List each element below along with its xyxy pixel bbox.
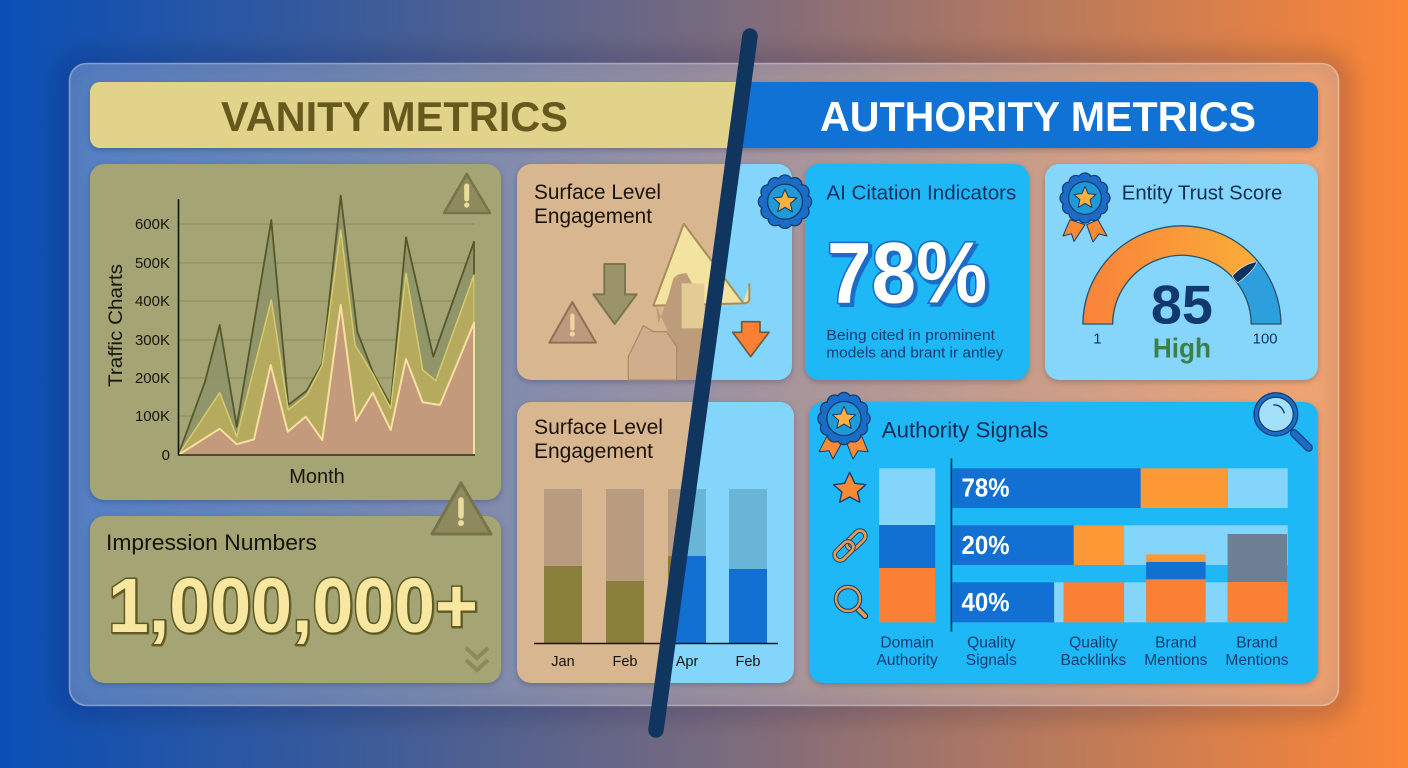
y axis labels <box>135 216 170 464</box>
impression value: 1,000,000+ <box>108 563 478 649</box>
month labels: Feb <box>736 654 760 670</box>
value labels <box>962 473 1010 617</box>
month labels: Jan <box>551 654 575 670</box>
heading: vanity metrics: VANITY METRICS <box>221 93 568 140</box>
header banner <box>90 82 1318 148</box>
panel: traffic charts <box>90 164 501 500</box>
card background blue side <box>670 402 796 688</box>
icon: warning triangle <box>432 483 491 534</box>
icon: star <box>833 472 866 502</box>
gauge rating: High <box>1153 333 1211 363</box>
bar: feb second <box>729 489 767 643</box>
gauge blue arc <box>1235 261 1281 324</box>
month labels: Apr <box>676 654 698 670</box>
surface heading: Engagement <box>534 205 652 228</box>
icon: down chevrons <box>466 648 488 670</box>
value labels: 40% <box>962 587 1010 617</box>
pink area series <box>178 305 474 455</box>
icon: warning triangle small <box>549 302 596 343</box>
authority card content <box>833 395 1309 669</box>
panel: surface level engagement bars <box>517 402 794 683</box>
icon: warning triangle <box>444 174 490 213</box>
panel: entity trust score <box>1045 164 1318 380</box>
bar baseline <box>534 642 778 644</box>
traffic area chart <box>105 196 475 488</box>
chart vertical axis <box>949 458 954 632</box>
icon: badge on surface card <box>758 175 812 228</box>
card background tan side <box>515 164 725 384</box>
y axis labels: 300K <box>135 332 170 349</box>
ai description: models and brant ir antley <box>826 344 1004 361</box>
ai description: Being cited in prominent <box>826 327 996 344</box>
icon: chain link <box>832 528 868 563</box>
gauge max label: 100 <box>1253 332 1277 348</box>
category labels: Mentions <box>1144 652 1208 669</box>
entity heading: Entity Trust Score <box>1122 181 1282 204</box>
icon: award ribbon <box>818 392 870 459</box>
ai card content <box>826 181 1016 361</box>
value labels: 20% <box>962 530 1010 560</box>
card background blue side <box>711 164 794 384</box>
glass dashboard panel <box>70 64 1338 706</box>
gauge needle <box>1232 262 1257 283</box>
y axis labels: 500K <box>135 255 170 272</box>
panel soft shadow <box>66 62 1342 708</box>
impression heading: Impression Numbers <box>106 530 317 555</box>
y axis labels: 400K <box>135 293 170 310</box>
stacked column: domain authority <box>879 468 935 622</box>
stacked column: brand mentions two <box>1228 534 1288 622</box>
impression card background <box>90 516 501 683</box>
surface heading: Engagement <box>534 440 653 463</box>
row: 20 percent <box>952 525 1288 565</box>
gauge <box>1083 226 1281 363</box>
category labels: Mentions <box>1225 652 1289 669</box>
category labels: Signals <box>966 652 1017 669</box>
category labels: Domain <box>880 635 934 652</box>
value labels: 78% <box>962 473 1010 503</box>
row: 40 percent <box>952 582 1228 622</box>
panel: ai citation indicators <box>805 164 1029 380</box>
chart grid lines <box>178 224 474 416</box>
ai card background <box>805 164 1029 380</box>
icon: orange down arrow <box>733 322 769 357</box>
surface heading: Surface Level <box>534 181 661 204</box>
surface heading: Surface Level <box>534 416 663 439</box>
slanted divider <box>656 36 750 730</box>
gauge value: 85 <box>1151 274 1213 335</box>
row: 78 percent <box>952 468 1288 508</box>
peak shape <box>656 273 710 380</box>
panel: authority signals <box>809 392 1318 683</box>
bar: apr tan side <box>668 489 681 584</box>
stacked column: brand mentions one <box>1146 554 1206 622</box>
traffic card background <box>90 164 501 500</box>
authority heading: Authority Signals <box>882 418 1048 443</box>
icon: olive down arrow <box>593 264 637 324</box>
y axis labels: 600K <box>135 216 170 233</box>
category labels: Brand <box>1155 635 1197 652</box>
dark area series <box>178 196 474 455</box>
authority card background <box>809 402 1318 683</box>
bar: apr blue side <box>676 489 706 643</box>
month labels: Feb <box>612 654 638 670</box>
y axis labels: 0 <box>162 447 170 464</box>
ai heading: AI Citation Indicators <box>826 181 1016 204</box>
percentage value: 78% <box>827 226 987 321</box>
panel: impression numbers <box>90 483 501 683</box>
category labels <box>876 635 1289 669</box>
panel: surface level engagement icons <box>517 164 792 380</box>
heading: authority metrics: AUTHORITY METRICS <box>820 93 1256 140</box>
x axis title: Month <box>289 466 345 488</box>
icon: award ribbon <box>1060 173 1110 242</box>
foreground peak <box>628 326 677 380</box>
header right: authority metrics <box>742 81 1321 153</box>
yellow area series <box>178 230 474 455</box>
category labels: Authority <box>876 652 938 669</box>
gauge min label: 1 <box>1093 332 1102 348</box>
icon: large magnifier <box>1256 395 1309 448</box>
chart axes <box>178 199 475 455</box>
icon: small magnifier <box>836 587 865 616</box>
header left: vanity metrics <box>88 82 736 152</box>
entity card background <box>1045 164 1318 380</box>
category labels: Brand <box>1236 635 1278 652</box>
bar: jan <box>544 489 582 643</box>
bar chart <box>534 489 778 670</box>
pale inner block <box>682 283 704 328</box>
y axis labels: 100K <box>135 408 170 425</box>
icon: large yellow triangle <box>653 224 749 306</box>
month labels <box>551 654 760 670</box>
category labels: Quality <box>1069 635 1118 652</box>
category labels: Quality <box>967 635 1016 652</box>
gauge orange arc <box>1083 226 1257 324</box>
bar: feb <box>606 489 644 643</box>
card background tan side <box>515 402 693 687</box>
y axis labels: 200K <box>135 370 170 387</box>
category labels: Backlinks <box>1061 652 1126 669</box>
entity card content <box>1083 181 1282 363</box>
y axis title: Traffic Charts <box>105 264 127 387</box>
declining illustration <box>549 224 769 380</box>
